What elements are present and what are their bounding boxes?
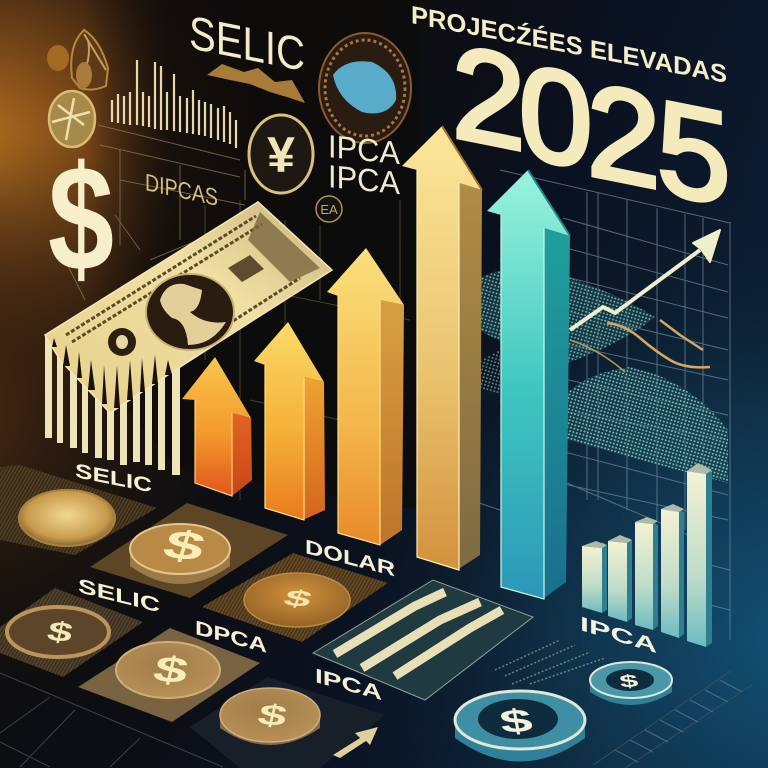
- icon: large blue coin: [455, 691, 585, 762]
- label and coin: IPCA: [580, 612, 672, 705]
- chart: mini bars: [582, 463, 712, 647]
- arrow 2: amber: [254, 322, 325, 520]
- label and coin: IPCA: IPCA: [580, 612, 657, 658]
- icon: yen coin: [249, 115, 313, 193]
- title: 2025: 5: [657, 72, 730, 234]
- card: coin DPCA: $: [149, 648, 193, 691]
- icon: small coin A: [316, 196, 342, 222]
- card: stripes panel: [313, 580, 533, 700]
- card: coin SELIC lower left: SELIC: [78, 575, 160, 618]
- icon: large blue coin: $: [497, 702, 535, 740]
- label: IPCA IPCA: [328, 128, 401, 201]
- chart: dotted data waves: [480, 268, 728, 483]
- title: Projeções elevadas: PROJECŹÉES ELEVADAS: [411, 0, 727, 89]
- chart: trend arrow line: [570, 230, 720, 372]
- title: 2025: 2: [452, 17, 525, 179]
- title: 2025: [452, 17, 730, 234]
- label and coin: IPCA: $: [618, 671, 640, 691]
- arrow 1: orange: [182, 357, 252, 496]
- heading: SELIC: SELIC: [189, 6, 305, 82]
- label: DPCA: DIPCAS: [145, 169, 218, 212]
- card: coin SELIC lower left: $: [44, 615, 77, 648]
- icon: banknote: [45, 202, 332, 413]
- panel: bottom grid lines: [0, 670, 752, 768]
- card: SELIC top: [0, 460, 157, 555]
- chart: striped bars under banknote: [45, 335, 180, 475]
- icon: dollar sign: $: [48, 134, 114, 302]
- icon: blue gem globe: [319, 33, 411, 143]
- card: coin SELIC lower left: [0, 575, 160, 677]
- card: coin DPCA: DPCA: [195, 617, 267, 658]
- card: coin IPCA: [190, 665, 385, 768]
- icon: gold mountain ridge: [207, 64, 305, 103]
- card: coin DPCA: [78, 617, 267, 722]
- arrow 5: teal: [487, 170, 570, 599]
- label: IPCA IPCA: IPCA: [328, 128, 401, 171]
- card: DOLAR: DOLAR: [305, 536, 395, 581]
- icon: gold medallion: [49, 91, 95, 147]
- title: 2025: 0: [519, 36, 592, 198]
- arrow 4: pale gold, tallest: [402, 126, 482, 570]
- chart: right line grid: [470, 170, 730, 640]
- card: DOLAR: [202, 536, 395, 642]
- card: DOLAR: $: [280, 585, 316, 612]
- card: coin IPCA: IPCA: [315, 665, 382, 705]
- decorative circuit lines: [60, 125, 245, 300]
- chart: top sparkline bars: [112, 60, 236, 148]
- panel: dark backdrop behind arrows: [85, 0, 420, 510]
- card: SELIC top: SELIC: [75, 460, 153, 497]
- title: 2025: 2: [587, 55, 660, 217]
- arrow 3: gold: [327, 248, 404, 545]
- label: IPCA IPCA: IPCA: [328, 158, 401, 201]
- icon: yen coin: ¥: [267, 127, 295, 183]
- card: coin on panel: [90, 503, 288, 598]
- card: coin IPCA: $: [254, 698, 291, 732]
- icon: gold globe top left: [47, 30, 108, 90]
- card: coin on panel: $: [158, 522, 210, 570]
- icon: small coin A: EA: [320, 202, 338, 217]
- card: dotted text panel: [495, 640, 605, 684]
